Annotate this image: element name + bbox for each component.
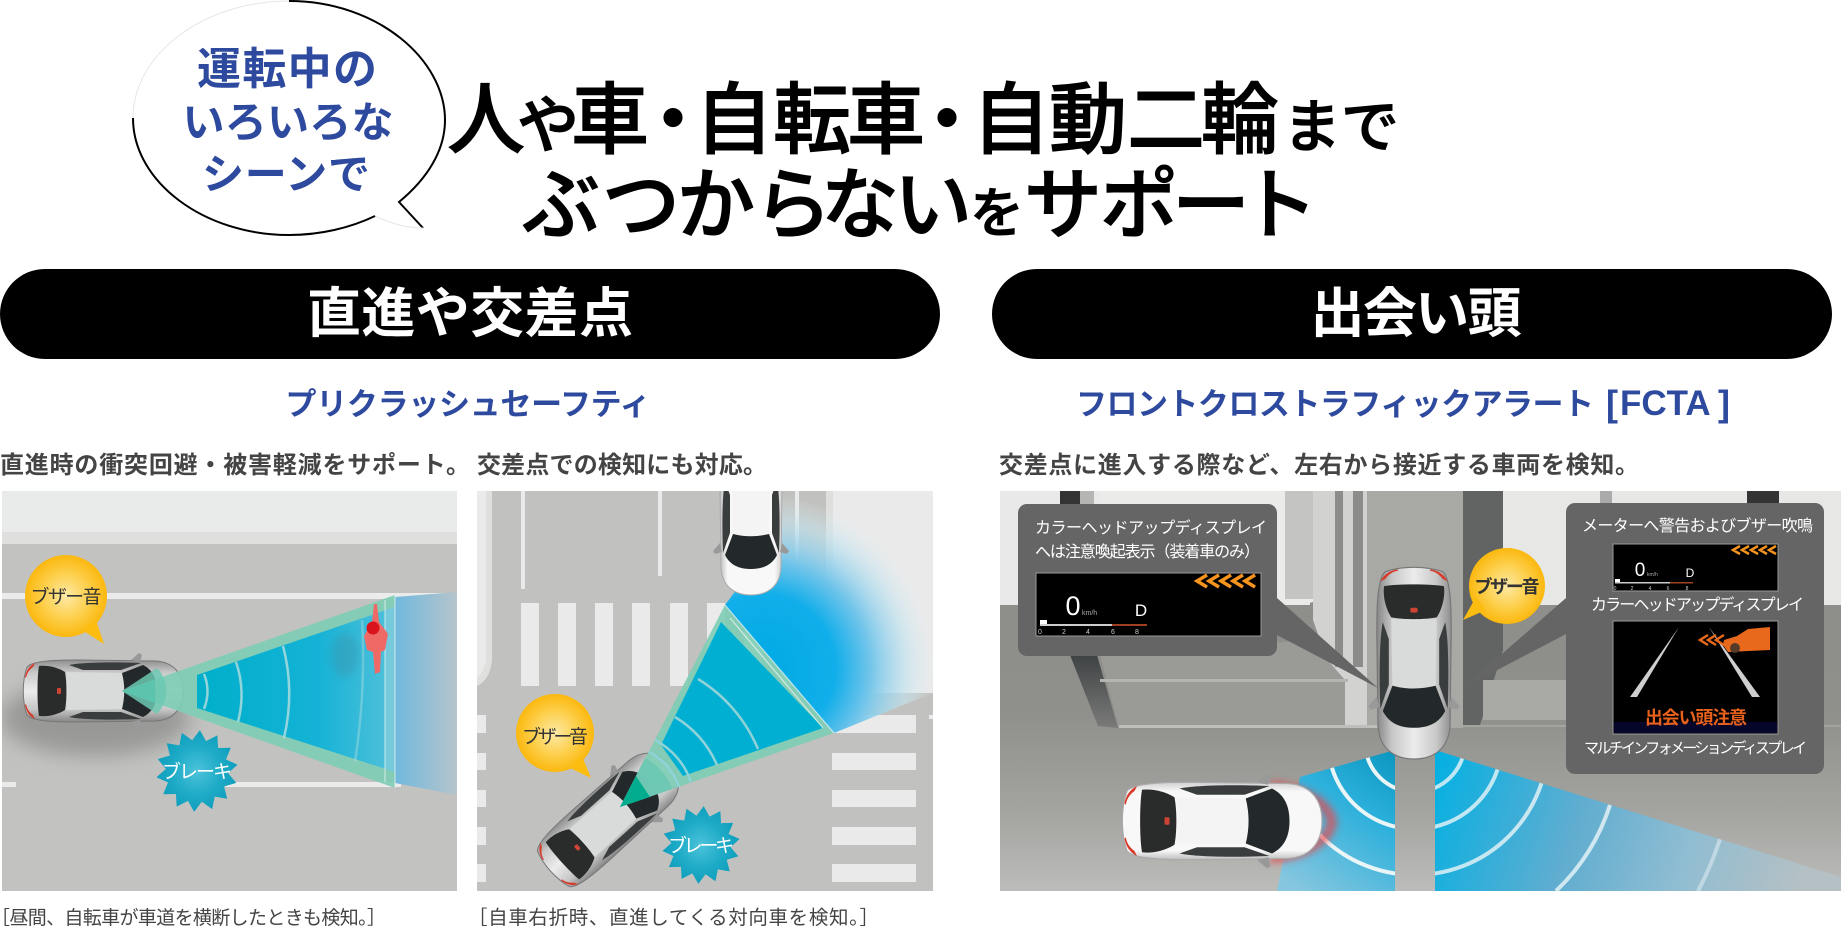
panel: straight road scene [0, 491, 457, 891]
title: か [677, 161, 755, 249]
panel: blind intersection scene [1000, 491, 1841, 891]
bubble text: 運転中の [197, 45, 377, 94]
bubble text: いろいろな [182, 99, 394, 146]
title: を [970, 184, 1024, 244]
description: FCTA detection: 交差点に進入する際など、左右から接近する車両を検知。 [999, 452, 1639, 479]
title: 動 [1049, 76, 1127, 164]
head-up display: 2 [1062, 629, 1066, 636]
meter display: D [1686, 566, 1695, 580]
subheading: FCTA: [ [1606, 383, 1618, 424]
radar beam [122, 595, 395, 788]
title: 自 [972, 76, 1050, 164]
oncoming white car [713, 491, 789, 596]
heading pill: crossing encounters [992, 269, 1832, 359]
caption: oncoming vehicle detection: ［自車右折時、直進してくる対向車を検知。］ [468, 907, 879, 929]
road gap and fans [1277, 752, 1841, 891]
heading pill: crossing encounters: 出会い頭 [1310, 284, 1522, 344]
left callout: へは注意喚起表示（装着車のみ） [1035, 543, 1260, 561]
title: ポ [1100, 161, 1178, 249]
brake burst: ブレーキ [668, 834, 734, 857]
right callout: メーターへ警告およびブザー吹鳴 [1582, 516, 1813, 535]
title: ・ [634, 76, 712, 164]
red alert glow [1270, 786, 1332, 858]
head-up display [1036, 573, 1261, 636]
buzzer bubble [25, 555, 107, 644]
bubble text: シーンで [202, 151, 370, 198]
meter display: 0 [1614, 586, 1617, 592]
title: 二 [1127, 76, 1205, 164]
brake burst [662, 806, 740, 884]
road and markings [477, 491, 933, 891]
head-up display: km/h [1082, 610, 1097, 617]
radar fade [725, 491, 933, 733]
right callout: マルチインフォメーションディスプレイ [1584, 739, 1807, 757]
head-up display: D [1135, 601, 1147, 620]
subheading: FCTA: フロントクロストラフィックアラート [1076, 387, 1594, 422]
heading pill: straight and intersection: 直進や交差点 [307, 284, 633, 344]
meter display: km/h [1647, 572, 1658, 578]
title: 車 [847, 76, 925, 164]
silver car turning [537, 752, 679, 888]
meter display: 8 [1686, 586, 1689, 592]
title: 人 [447, 76, 525, 164]
meter display [1613, 544, 1778, 592]
heading pill: straight and intersection [0, 269, 940, 359]
head-up display: 0 [1038, 629, 1042, 636]
title: 車 [571, 76, 649, 164]
title: ま [1283, 95, 1341, 160]
panel: right-turn intersection scene [477, 491, 933, 891]
buzzer bubble: ブザー音 [1474, 576, 1540, 597]
bubble outline [133, 1, 445, 235]
meter display: 0 [1635, 560, 1645, 581]
buzzer bubble [516, 694, 594, 778]
brake burst: ブレーキ [162, 760, 232, 783]
radar beam [620, 605, 834, 807]
meter display: 2 [1631, 586, 1634, 592]
description: collision avoidance: 直進時の衝突回避・被害軽減をサポート。 [0, 452, 470, 479]
title: ぶ [522, 161, 600, 249]
title: い [894, 161, 972, 249]
meter display: 4 [1649, 586, 1652, 592]
left callout: カラーヘッドアップディスプレイ [1035, 518, 1267, 537]
buzzer bubble: ブザー音 [522, 725, 588, 748]
title: ト [1240, 161, 1318, 249]
title: サ [1024, 161, 1102, 249]
title: 転 [773, 76, 851, 164]
subheading: FCTA [1076, 383, 1730, 424]
description: intersection detection: 交差点での検知にも対応。 [477, 452, 767, 479]
left callout [1018, 504, 1378, 688]
bubble text [182, 45, 394, 198]
host car [1368, 567, 1460, 759]
buzzer bubble [1463, 548, 1545, 624]
title: ・ [908, 76, 986, 164]
right callout: カラーヘッドアップディスプレイ [1591, 595, 1804, 614]
meter display: 6 [1667, 586, 1670, 592]
caption: cyclist detection: ［昼間、自転車が車道を横断したときも検知。］ [0, 907, 386, 929]
brake burst [156, 730, 238, 812]
approaching white car [1122, 774, 1322, 868]
title: な [821, 161, 899, 249]
speech bubble: scenes while driving [133, 1, 445, 235]
head-up display: 6 [1111, 629, 1115, 636]
multi-information display: 出会い頭注意 [1645, 708, 1747, 728]
buzzer bubble: ブザー音 [30, 585, 102, 608]
subheading: FCTA: ] [1718, 383, 1730, 424]
head-up display: 8 [1135, 629, 1139, 636]
title: つ [602, 161, 680, 249]
head-up display: 4 [1086, 629, 1090, 636]
title: で [1341, 95, 1399, 160]
silver car [22, 653, 178, 722]
title: 自 [695, 76, 773, 164]
cyclist [331, 604, 388, 677]
radar fade [395, 592, 457, 795]
road and buildings [1000, 491, 1841, 891]
title: や [517, 92, 579, 161]
title: 輪 [1201, 76, 1279, 164]
multi-information display [1613, 621, 1778, 734]
road [2, 491, 457, 891]
head-up display: 0 [1065, 591, 1081, 621]
subheading: pre-crash safety: プリクラッシュセーフティ [286, 387, 650, 422]
title: ら [754, 161, 832, 249]
car shadow [0, 680, 190, 756]
subheading: FCTA: FCTA [1620, 384, 1711, 423]
title [447, 76, 1399, 249]
right callout [1463, 503, 1824, 774]
title: ー [1172, 161, 1250, 249]
